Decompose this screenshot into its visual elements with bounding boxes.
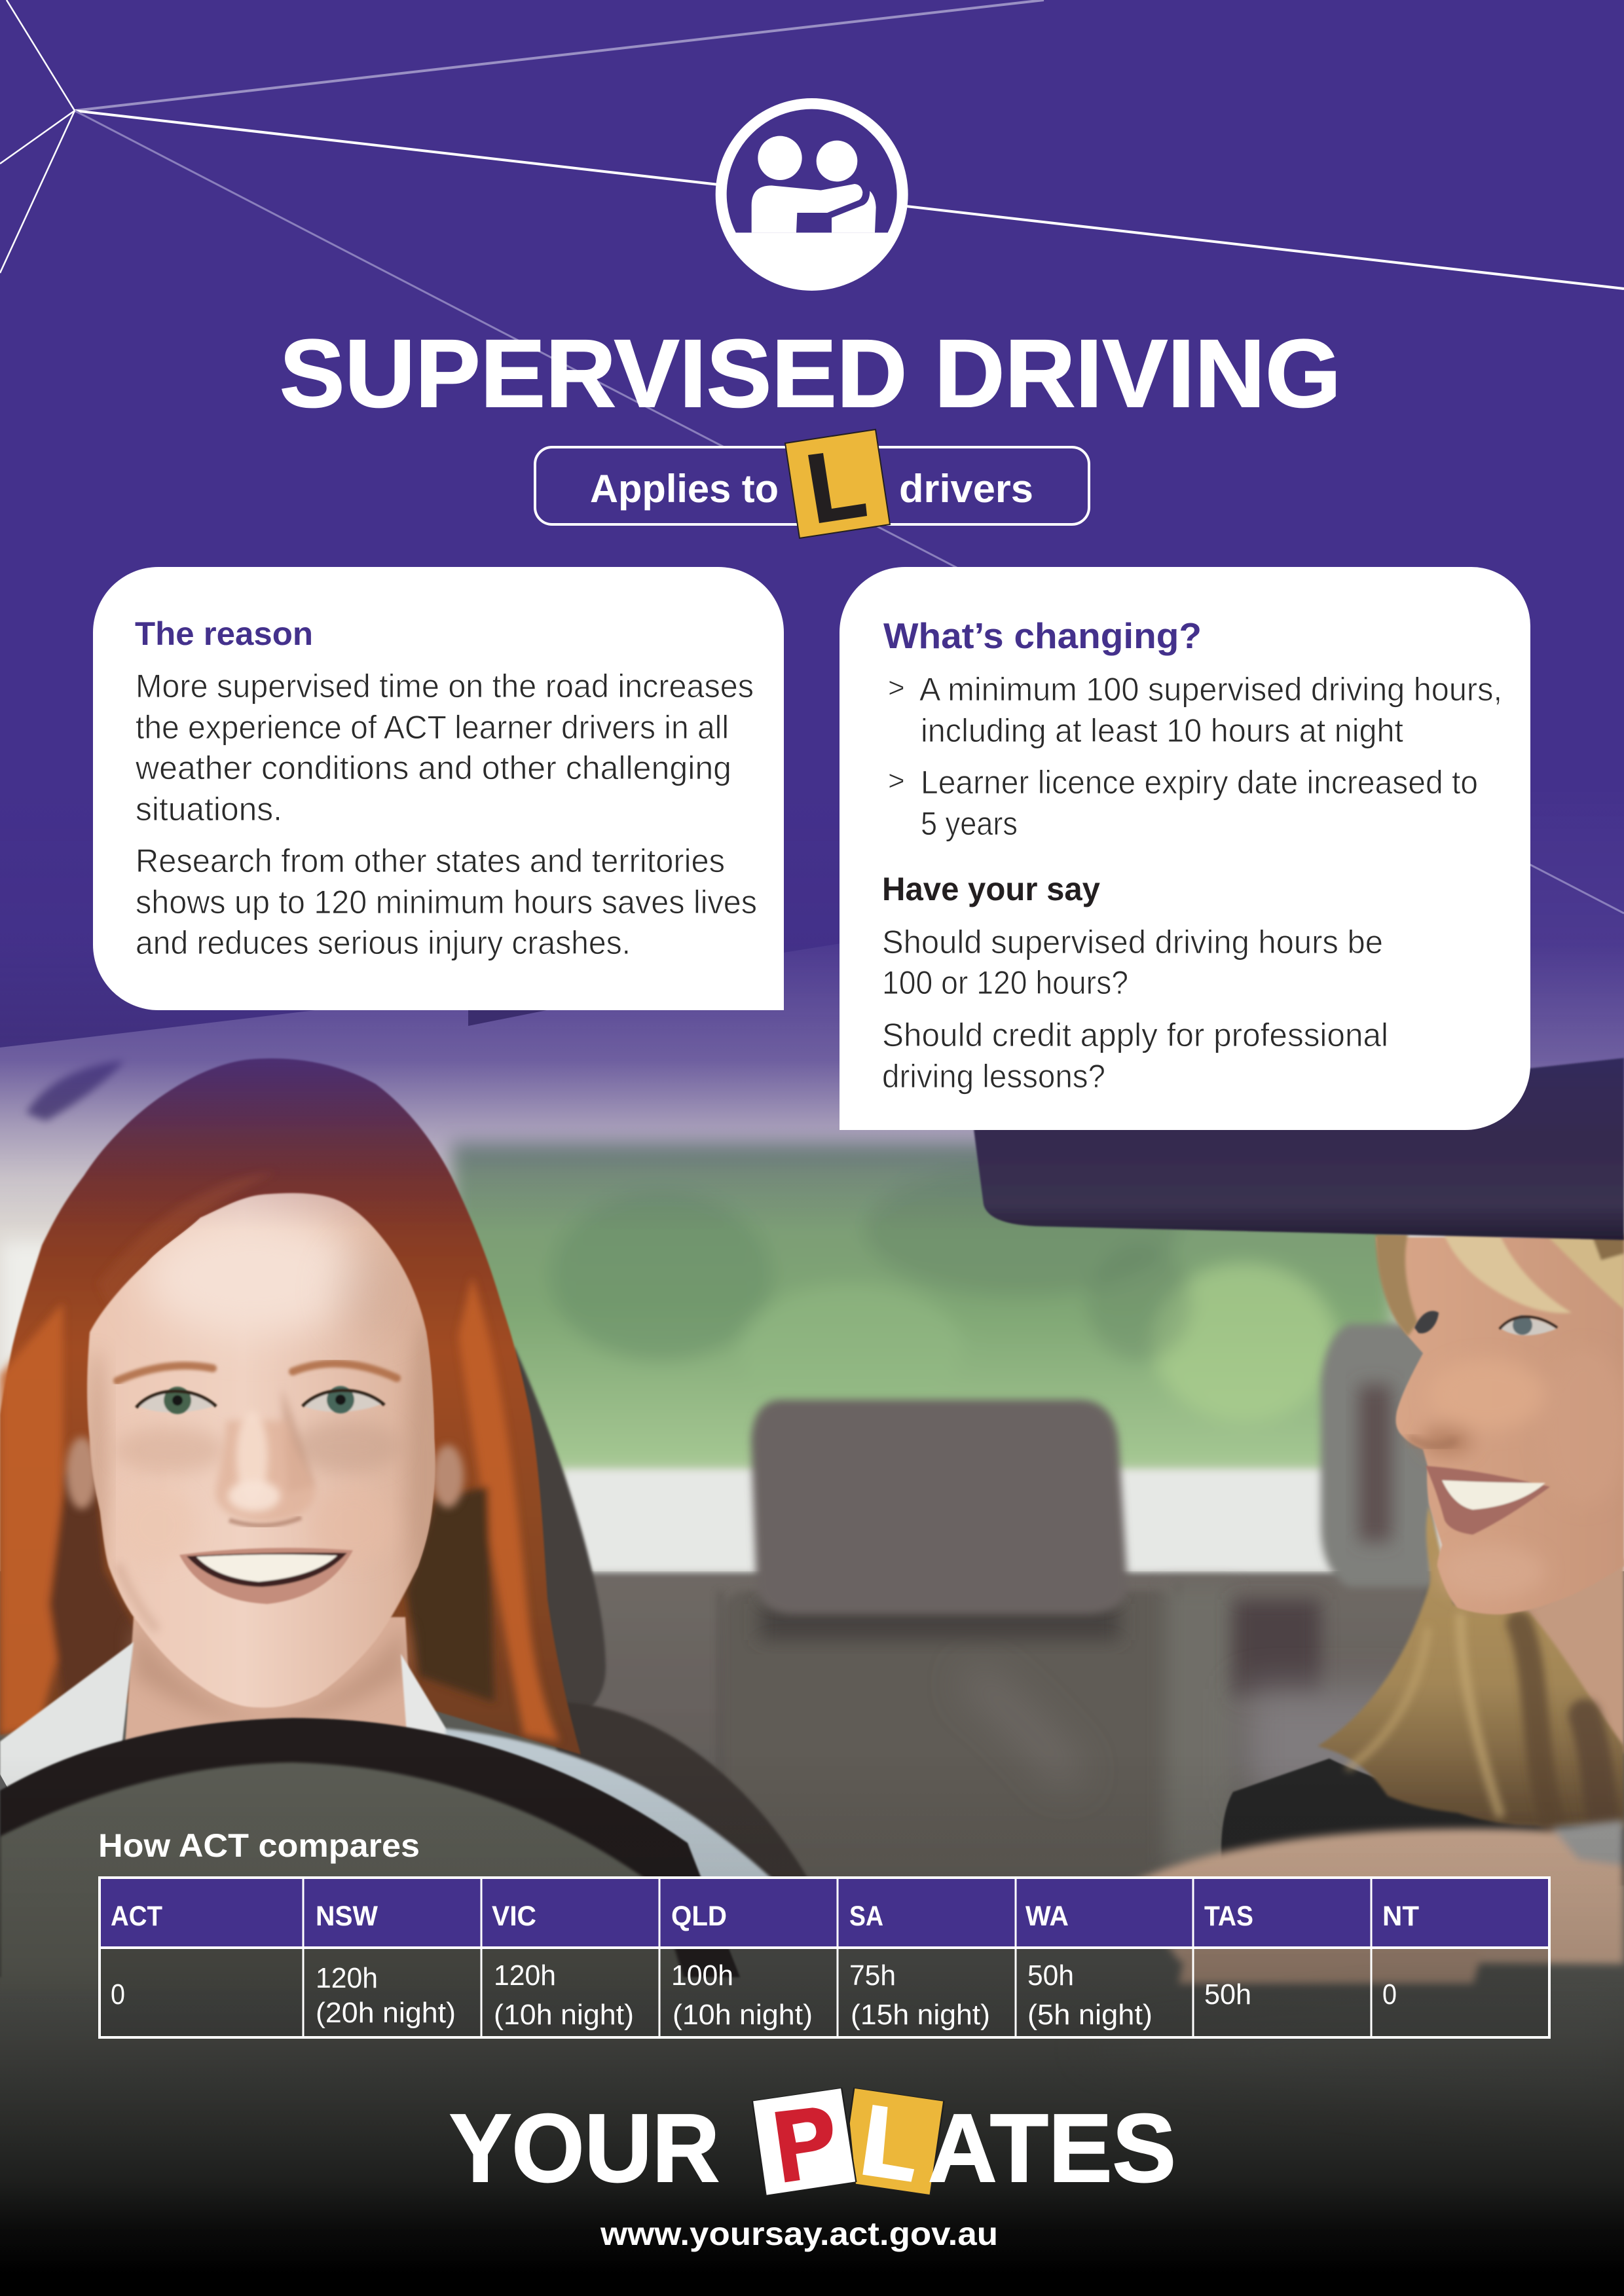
heading: have your say: Have your say: [882, 871, 1100, 907]
table data values: (10h night): [494, 1999, 634, 2031]
photo: rear-view mirror: [974, 1058, 1624, 1240]
photo: supervisor lower hair: [1318, 1506, 1624, 1829]
heading: the reason: The reason: [135, 615, 313, 652]
table data values: 0: [1382, 1978, 1397, 2011]
photo: pale side window: [0, 1241, 79, 1437]
table data values: (15h night): [851, 1999, 990, 2031]
table data values: 100h: [671, 1959, 733, 1992]
photo: headrest shadow: [760, 1604, 1120, 1640]
table data values: (10h night): [673, 1999, 813, 2031]
badge: applies to L drivers: Applies to: [590, 467, 779, 511]
text block: reason body: the experience of ACT learner drivers in all: [136, 709, 729, 746]
list: changes: including at least 10 hours at night: [921, 712, 1403, 749]
photo: learner ears: [66, 1437, 464, 1509]
table data values: 50h: [1027, 1959, 1074, 1992]
list: changes: 5 years: [921, 805, 1018, 842]
icon: L plate: [785, 429, 890, 538]
photo: learner nose: [215, 1411, 316, 1525]
table: state comparison: [100, 1878, 1549, 2037]
badge: applies to L drivers: [535, 429, 1089, 538]
photo: driver's seat: [498, 1346, 812, 1886]
table header labels: NT: [1382, 1901, 1419, 1932]
photo: bright strip below window: [563, 1470, 1336, 1575]
table header fill: [100, 1878, 1549, 1948]
photo: bottom dark fade: [0, 1755, 1624, 2296]
photo: supervisor eyes: [1414, 1311, 1557, 1336]
text block: reason body: situations.: [136, 791, 282, 828]
text block: reason body: More supervised time on the road increases: [136, 668, 754, 704]
photo: right headrest: [1321, 1324, 1434, 1587]
table header labels: QLD: [671, 1901, 727, 1932]
table data values: 50h: [1204, 1978, 1251, 2011]
icon: supervising figures in circle: [716, 98, 908, 291]
photo: supervisor nose shadow: [1408, 1437, 1457, 1446]
table data values: 75h: [849, 1959, 896, 1992]
list: changes: A minimum 100 supervised driving hours,: [919, 671, 1502, 708]
text block: reason body: [135, 668, 757, 961]
website url: www.yoursay.act.gov.au: [600, 2215, 998, 2252]
panel: what's changing: [840, 567, 1530, 1130]
photo: learner eyebrows: [117, 1364, 397, 1381]
photo: learner neck shadow: [134, 1624, 405, 1722]
text block: questions: Should credit apply for professional: [882, 1017, 1388, 1053]
photo: learner hair highlights: [0, 1172, 560, 1741]
photo: learner smile: [179, 1548, 353, 1604]
table header labels: SA: [849, 1901, 883, 1932]
text block: reason body: weather conditions and other challenging: [135, 750, 731, 786]
icon: P and L plates: [752, 2088, 944, 2195]
title: SUPERVISED DRIVING: [280, 320, 1341, 428]
table header labels: [111, 1901, 1419, 1932]
logo: your plates: [449, 2088, 1176, 2202]
photo: rear window foliage: [452, 1142, 1395, 1473]
photo: steering wheel: [0, 1718, 740, 1990]
list: changes: >: [888, 765, 905, 797]
table header labels: VIC: [492, 1901, 536, 1932]
photo: dark ceiling band: [0, 786, 845, 1048]
table header labels: NSW: [316, 1901, 378, 1932]
badge: applies to L drivers: drivers: [899, 467, 1033, 511]
panel: the reason: [93, 567, 784, 1010]
photo: learner shirt: [0, 1642, 779, 1886]
photo: supervisor face shading: [1421, 1349, 1624, 1597]
photo: learner eyes: [136, 1386, 384, 1414]
text block: questions: driving lessons?: [882, 1058, 1105, 1095]
photo: learner hair: [0, 1059, 581, 1755]
photo: supervisor face: [1376, 1237, 1624, 1614]
list: changes: [888, 671, 1502, 842]
purple top background: [0, 0, 1624, 1309]
table data values: 120h: [316, 1962, 378, 1994]
heading: what's changing: What’s changing?: [883, 615, 1202, 656]
table header labels: WA: [1025, 1901, 1069, 1932]
photo: supervisor jacket: [1221, 1758, 1624, 1886]
photo: learner face: [86, 1193, 444, 1707]
photo: supervisor arm and hand: [1126, 1820, 1624, 1984]
list: changes: >: [888, 672, 905, 704]
text block: reason body: shows up to 120 minimum hours saves lives: [136, 884, 757, 920]
heading: how ACT compares: How ACT compares: [98, 1827, 420, 1864]
photo: supervisor fringe: [1376, 1234, 1624, 1336]
table header labels: TAS: [1204, 1901, 1253, 1932]
photo: dashboard: [1074, 2003, 1624, 2115]
photo: learner driver and supervisor in car: [0, 903, 1624, 2240]
text block: questions: [882, 924, 1388, 1095]
text block: questions: 100 or 120 hours?: [882, 964, 1128, 1001]
table data values: (20h night): [316, 1997, 456, 2029]
logo: your plates: YOUR: [449, 2094, 720, 2202]
logo: your plates: ATES: [928, 2094, 1176, 2202]
photo: centre headrest: [751, 1400, 1128, 1614]
table data values: (5h night): [1027, 1999, 1153, 2031]
table data values: 120h: [494, 1959, 556, 1992]
photo: grab handle: [26, 1061, 124, 1121]
table data values: 0: [111, 1978, 125, 2011]
table data values: [111, 1959, 1397, 2031]
text block: reason body: and reduces serious injury crashes.: [136, 924, 631, 961]
photo: supervisor smile: [1426, 1466, 1550, 1535]
photo: supervisor neck: [1506, 1558, 1624, 1755]
dark visor fragment under the panel: [468, 1010, 547, 1026]
table body fill: [100, 1948, 1549, 2037]
network lines: [0, 0, 1624, 913]
photo: learner neck: [124, 1617, 413, 1755]
text block: reason body: Research from other states and territories: [136, 843, 725, 879]
photo: ceiling: [0, 786, 1624, 1571]
photo: back seat: [576, 1575, 1428, 1902]
list: changes: Learner licence expiry date increased to: [921, 764, 1478, 801]
text block: questions: Should supervised driving hours be: [882, 924, 1383, 960]
table header labels: ACT: [111, 1901, 162, 1932]
